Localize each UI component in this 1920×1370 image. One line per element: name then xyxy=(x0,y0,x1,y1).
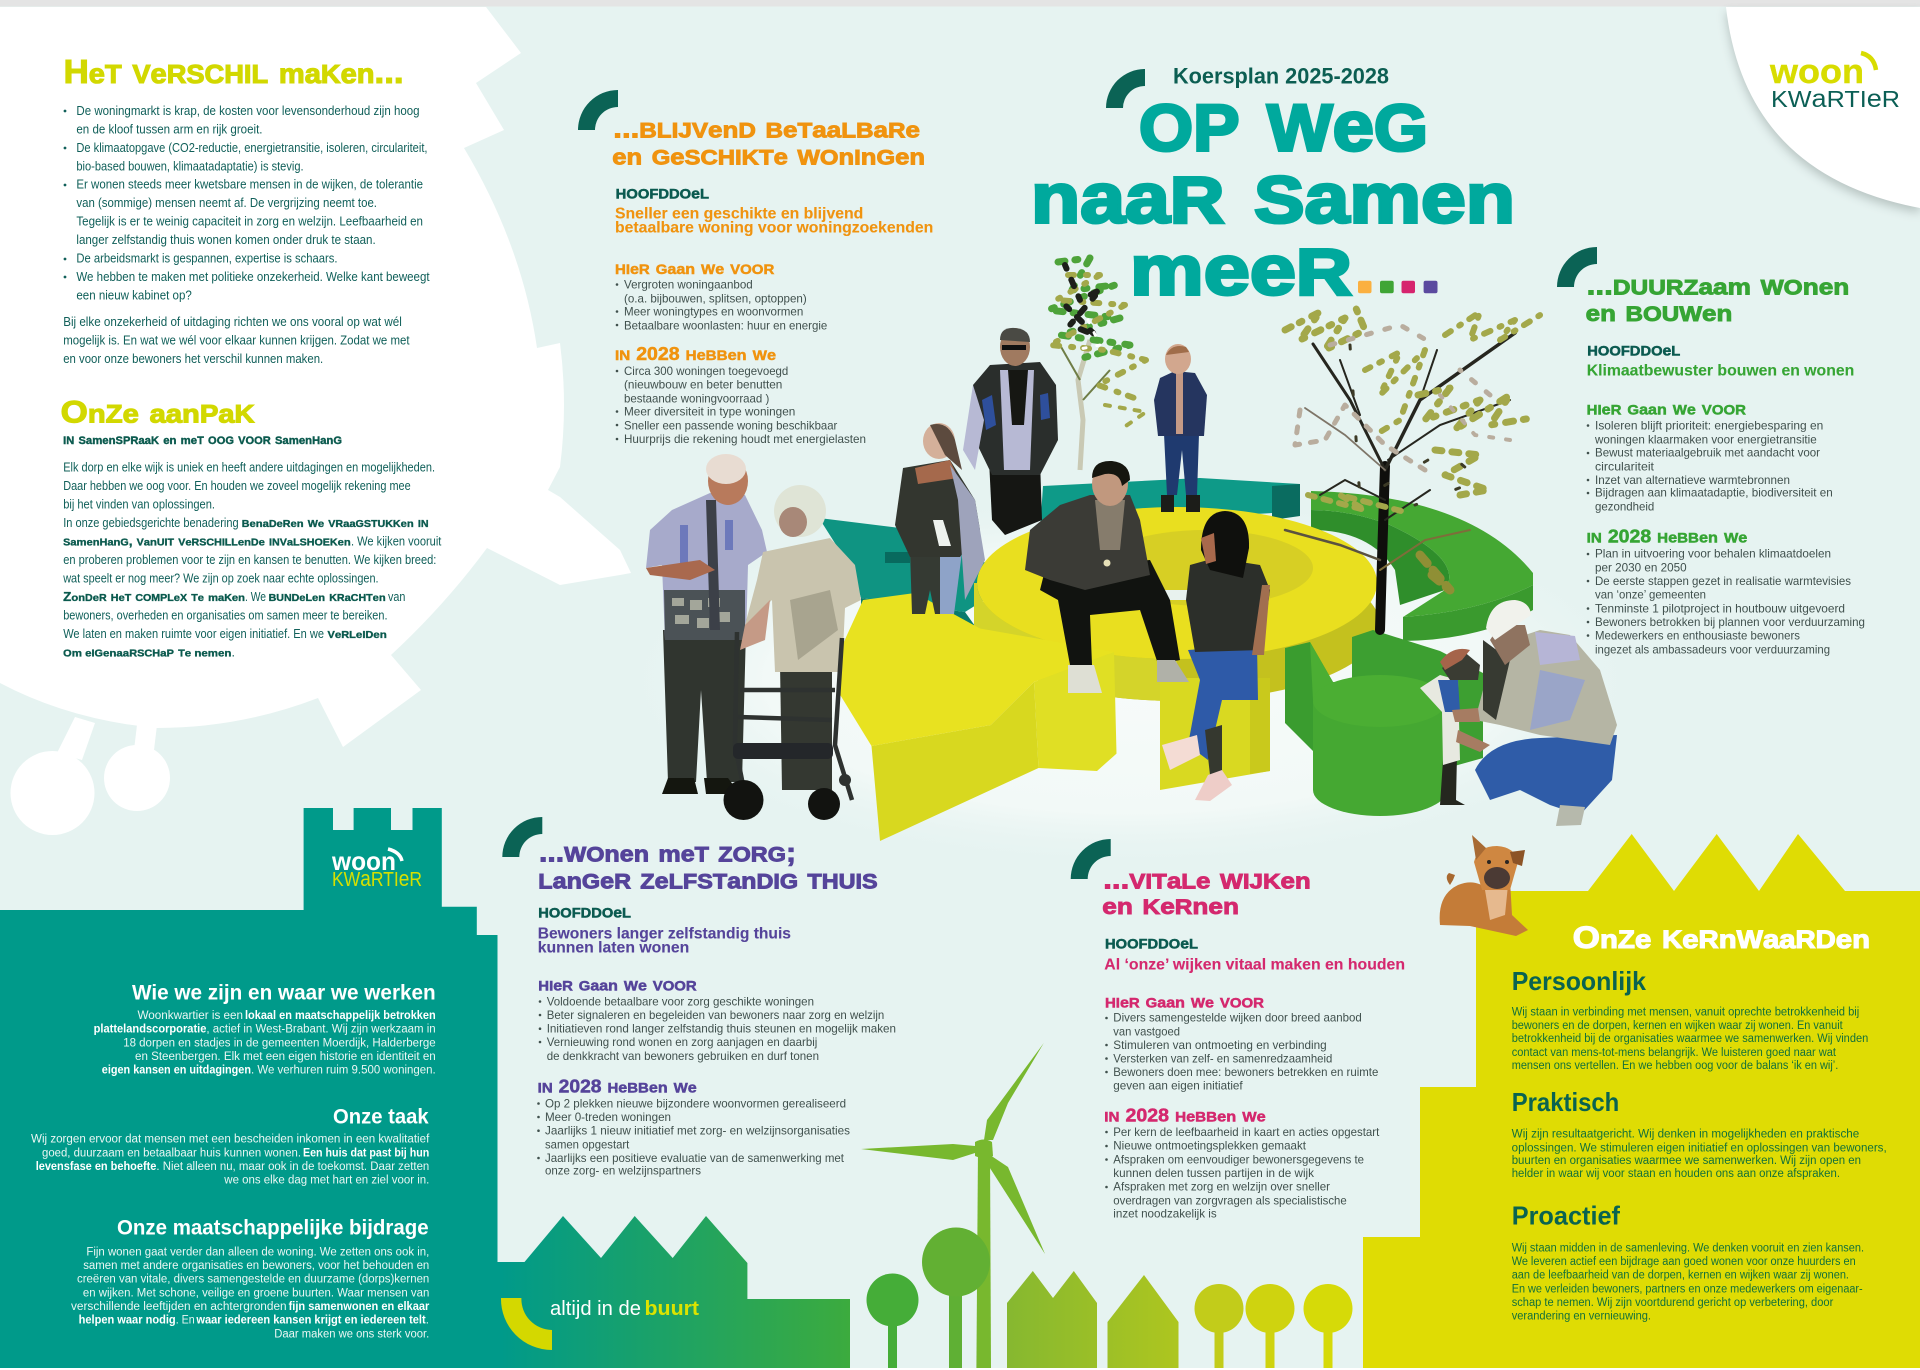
hier gaan we voor: Meer woningtypes en woonvormen xyxy=(624,305,803,319)
hier gaan we voor: circulariteit xyxy=(1595,460,1655,474)
paragraph: onze taak: Wij zorgen ervoor dat mensen met een bescheiden inkomen in een kwalitatief xyxy=(31,1134,430,1146)
four coloured dots xyxy=(1358,281,1438,293)
green arc back right xyxy=(1311,491,1533,641)
in 2028 hebben we: Tenminste 1 pilotproject in houtbouw uitgevoerd xyxy=(1595,601,1845,615)
in 2028 hebben we: Plan in uitvoering voor behalen klimaatdoelen xyxy=(1595,547,1831,561)
bullet list: Tegelijk is er te weinig capaciteit in zorg en welzijn. Leefbaarheid en xyxy=(76,215,423,229)
in 2028 hebben we: per 2030 en 2050 xyxy=(1595,561,1687,575)
paragraph: onze taak: goed, duurzaam en betaalbaar huis kunnen wonen. xyxy=(42,1147,301,1159)
subheading: in samenspraak en met oog voor samenhang xyxy=(63,431,342,448)
green block front xyxy=(1285,630,1483,816)
paragraph: en proberen problemen voor te zijn en kansen te benutten. We kijken breed: xyxy=(63,553,436,567)
logo: woonkwartier: woon xyxy=(1769,53,1864,91)
value: proactief xyxy=(1512,1201,1864,1322)
in 2028 hebben we xyxy=(537,1075,850,1178)
logo in castle: woon xyxy=(331,846,396,876)
value: proactief: Wij staan midden in de samenleving. We denken vooruit en zien kansen. xyxy=(1512,1243,1864,1255)
in 2028 hebben we: Huurprijs die rekening houdt met energielasten xyxy=(624,432,866,446)
hier gaan we voor: Initiatieven rond langer zelfstandig thuis steunen en mogelijk maken xyxy=(547,1022,896,1036)
branches xyxy=(1285,333,1515,630)
illustration: standing man with sunglasses xyxy=(963,328,1058,535)
paragraph: wie we zijn: . We verhuren ruim 9.500 woningen. xyxy=(251,1065,436,1077)
paragraph: om eigenaarsch ap te nemen xyxy=(63,644,231,660)
in 2028 hebben we: Medewerkers en enthousiaste bewoners xyxy=(1595,629,1800,643)
in 2028 hebben we: Afspraken om eenvoudiger bewonersgegevens te xyxy=(1113,1152,1364,1166)
value: persoonlijk: betrokkenheid bij de organisaties waarmee we samenwerken. Wij vinden xyxy=(1512,1033,1868,1045)
bottom white strip xyxy=(0,1368,1920,1370)
value: persoonlijk: bewoners en de dorpen, kernen en wijken waar zij wonen. En vanuit xyxy=(1512,1020,1843,1032)
paragraph: maatschappelijke bijdrage: en wijken. Met schone, veilige en groene buurten. Waar mensen van xyxy=(83,1287,429,1299)
paragraph: maatschappelijke bijdrage: verschillende leeftijden en achtergronden xyxy=(71,1301,287,1313)
panel: vitale wijken (pink) xyxy=(1071,839,1405,1220)
value: persoonlijk: contact van mens-tot-mens belangrijk. We luisteren goed naar wat xyxy=(1512,1047,1837,1059)
in 2028 hebben we: onze zorg- en welzijnspartners xyxy=(545,1164,701,1178)
paragraph: maatschappelijke bijdrage: samen met andere organisaties en bewoners, voor het behouden en xyxy=(83,1260,429,1272)
yellow arrow block xyxy=(837,593,1116,841)
bullet list xyxy=(64,104,430,302)
paragraph: bij het vinden van oplossingen. xyxy=(63,498,215,512)
heading: en bouw en xyxy=(1586,295,1732,328)
value: praktisch: Wij zijn resultaatgericht. Wij denken in mogelijkheden en praktische xyxy=(1512,1128,1859,1140)
panel: wonen met zorg (purple) xyxy=(502,817,896,1178)
value: persoonlijk xyxy=(1512,966,1868,1072)
paragraph: bundelen krachten xyxy=(269,588,386,604)
tagline: altijd in de buurt: buurt xyxy=(644,1298,699,1320)
paragraph: maatschappelijke bijdrage: helpen waar nodig xyxy=(79,1315,176,1327)
hier gaan we voor: Bijdragen aan klimaatadaptie, biodiversiteit en xyxy=(1595,486,1833,500)
heading: en kernen xyxy=(1102,888,1239,921)
logo in castle: kwartier xyxy=(332,861,422,893)
illustration: child and kneeling worker xyxy=(1420,600,1617,826)
heading xyxy=(1102,862,1311,921)
paragraph: Zonder het compl ex te maken xyxy=(63,588,245,604)
in 2028 hebben we: Per kern de leefbaarheid in kaart en acties opgestart xyxy=(1113,1125,1380,1139)
bullet list: en de kloof tussen arm en rijk groeit. xyxy=(76,122,263,136)
paragraph: benaderen we vraagstukk en in xyxy=(242,514,429,530)
arc xyxy=(1071,839,1111,879)
left text: het verschil maken xyxy=(63,50,430,366)
hier gaan we voor: de denkkracht van bewoners gebruiken en durf tonen xyxy=(547,1049,819,1063)
paragraph: maatschappelijke bijdrage: . En xyxy=(176,1315,195,1327)
paragraph: wie we zijn: plattelandscorporatie xyxy=(94,1024,206,1036)
panel: duurzaam wonen (green) xyxy=(1557,247,1865,656)
illustration: big tree xyxy=(1285,306,1545,630)
value: proactief: En we verleiden bewoners, partners en onze medewerkers om eigenaar- xyxy=(1512,1283,1863,1295)
hier gaan we voor xyxy=(538,973,896,1063)
teal block left xyxy=(819,518,1000,640)
heading: langer zelfst andig thuis xyxy=(538,862,878,895)
main title: mee r xyxy=(1130,209,1352,314)
paragraph: wie we zijn: Woonkwartier is een xyxy=(138,1010,243,1022)
paragraph: maatschappelijke bijdrage: fijn samenwonen en elkaar xyxy=(289,1301,430,1313)
value: praktisch xyxy=(1512,1087,1887,1180)
in 2028 hebben we: (nieuwbouw en beter benutten xyxy=(624,378,782,392)
paragraph: mogelijk is. En wat we wél voor elkaar kunnen krijgen. Zodat we met xyxy=(63,334,410,348)
heading xyxy=(1586,268,1849,328)
illustration: seated man xyxy=(1025,461,1189,693)
value: persoonlijk: Persoonlijk xyxy=(1512,966,1647,996)
logo in castle xyxy=(331,846,422,893)
arc xyxy=(1557,247,1597,287)
in 2028 hebben we: Meer diversiteit in type woningen xyxy=(624,405,795,419)
paragraph: In onze gebiedsgerichte benadering xyxy=(63,516,239,530)
walker xyxy=(735,632,852,800)
paragraph: en voor onze bewoners het verschil kunnen maken. xyxy=(63,352,323,366)
hier gaan we voor: Vernieuwing rond wonen en zorg aanjagen en daarbij xyxy=(547,1035,817,1049)
hier gaan we voor: hier gaan we voor xyxy=(1587,398,1746,420)
in 2028 hebben we: kunnen delen tussen partijen in de wijk xyxy=(1113,1166,1315,1180)
heading xyxy=(538,836,878,895)
yellow block under seated woman xyxy=(1160,678,1270,790)
logo: woonkwartier: kwartier xyxy=(1771,77,1900,114)
in 2028 hebben we: overdragen van zorgvragen als specialistische xyxy=(1113,1193,1347,1207)
value: praktisch: Praktisch xyxy=(1512,1087,1619,1117)
hier gaan we voor: Isoleren blijft prioriteit: energiebesparing en xyxy=(1595,418,1823,432)
bullet list: De klimaatopgave (CO2-reductie, energietransitie, isoleren, circulariteit, xyxy=(76,141,428,155)
hier gaan we voor: van vastgoed xyxy=(1113,1024,1180,1038)
paragraph: We laten en maken ruimte voor eigen initiatief. En we xyxy=(63,627,324,641)
trees and houses in skyline xyxy=(866,1228,1352,1368)
hier gaan we voor: Betaalbare woonlasten: huur en energie xyxy=(624,318,828,332)
heading: en geschikt e wo ningen xyxy=(612,139,925,172)
heading: ...wonen met zorg ; xyxy=(539,836,796,869)
bullet list: van (sommige) mensen neemt af. De vergrijzing neemt toe. xyxy=(76,196,377,210)
hier gaan we voor: geven aan eigen initiatief xyxy=(1113,1079,1243,1093)
paragraph: Daar hebben we oog voor. En houden we zoveel mogelijk rekening mee xyxy=(63,479,411,493)
bullet list: bio-based bouwen, klimaatadaptatie) is stevig. xyxy=(76,159,304,173)
paragraph: . xyxy=(232,646,235,660)
yellow ring xyxy=(974,507,1380,701)
in 2028 hebben we: Meer 0-treden woningen xyxy=(545,1110,671,1124)
hoofddoel: hoofddo el xyxy=(616,181,709,203)
in 2028 hebben we: Op 2 plekken nieuwe bijzondere woonvormen gerealiseerd xyxy=(545,1096,846,1110)
logo: woonkwartier xyxy=(1769,53,1900,114)
hoofddoel: betaalbare woning voor woningzoekenden xyxy=(615,220,933,237)
heading: Onze aanpak xyxy=(61,392,255,431)
in 2028 hebben we: Jaarlijks een positieve evaluatie van de samenwerking met xyxy=(545,1151,845,1165)
paragraph: verleiden xyxy=(328,625,387,641)
hoofddoel: hoofddoel xyxy=(1587,339,1681,361)
paragraph: onze taak: . Niet alleen nu, maar ook in de toekomst. Daar zetten xyxy=(156,1161,429,1173)
hier gaan we voor: Divers samengestelde wijken door breed aanbod xyxy=(1113,1011,1362,1025)
illustration: seated woman with headscarf xyxy=(1162,511,1270,801)
heading: ...vitale wijk en xyxy=(1103,862,1311,895)
paragraph: . We kijken vooruit xyxy=(351,534,442,548)
in 2028 hebben we: inzet noodzakelijk is xyxy=(1113,1206,1217,1220)
main title: op weg xyxy=(1139,66,1428,171)
in 2028 hebben we: Nieuwe ontmoetingsplekken gemaakt xyxy=(1113,1139,1307,1153)
hoofddoel: hoofddoel xyxy=(1105,932,1198,954)
in 2028 hebben we: in 2028 hebben we xyxy=(615,343,776,365)
paragraph: wie we zijn: en Steenbergen. Elk met een eigen historie en identiteit en xyxy=(135,1051,436,1063)
hoofddoel xyxy=(538,901,791,957)
bottom skyline: teal-green buildings xyxy=(500,1216,850,1368)
paragraph: Elk dorp en elke wijk is uniek en heeft andere uitdagingen en mogelijkheden. xyxy=(63,461,435,475)
paragraph: Bij elke onzekerheid of uitdaging richten we ons vooral op wat wél xyxy=(63,315,402,329)
paragraph: wie we zijn: eigen kansen en uitdagingen xyxy=(102,1065,251,1077)
paragraph xyxy=(62,461,442,660)
in 2028 hebben we: Circa 300 woningen toegevoegd xyxy=(624,364,788,378)
paragraph: wie we zijn: lokaal en maatschappelijk betrokken xyxy=(245,1010,436,1022)
illustration: old man xyxy=(646,454,767,794)
browser top bar xyxy=(0,0,1920,6)
hier gaan we voor: hier gaan we voor xyxy=(615,257,774,279)
paragraph: . We xyxy=(245,590,266,604)
in 2028 hebben we: van ‘onze’ gemeenten xyxy=(1595,588,1706,602)
hier gaan we voor xyxy=(1105,991,1379,1093)
bullet list: De woningmarkt is krap, de kosten voor levensonderhoud zijn hoog xyxy=(76,104,420,118)
tagline: altijd in de buurt: altijd in de xyxy=(550,1298,641,1320)
hoofddoel: kunnen laten wonen xyxy=(538,940,689,957)
in 2028 hebben we xyxy=(1104,1105,1380,1220)
hier gaan we voor: Versterken van zelf- en samenredzaamheid xyxy=(1113,1051,1332,1065)
heading: Het verschil maken... xyxy=(64,50,404,91)
paragraph xyxy=(63,315,410,366)
in 2028 hebben we: in 2028 hebben we xyxy=(1587,526,1747,548)
in 2028 hebben we: ingezet als ambassadeurs voor verduurzaming xyxy=(1595,642,1830,656)
paragraph: van xyxy=(388,590,405,604)
paragraph: onze taak: we ons elke dag met hart en ziel voor in. xyxy=(223,1175,429,1187)
paragraph: maatschappelijke bijdrage: Daar maken we ons sterk voor. xyxy=(274,1328,429,1340)
paragraph: maatschappelijke bijdrage: . xyxy=(426,1315,429,1327)
hier gaan we voor xyxy=(1587,398,1833,513)
teal block back right xyxy=(1040,478,1300,530)
value: proactief: verandering en vernieuwing. xyxy=(1512,1310,1651,1322)
paragraph: maatschappelijke bijdrage: waar iedereen kansen krijgt en iedereen telt xyxy=(195,1315,426,1327)
value: praktisch: helder in waar wij voor staan en houden ons aan onze afspraken. xyxy=(1512,1168,1840,1180)
hier gaan we voor: Bewust materiaalgebruik met aandacht voor xyxy=(1595,446,1820,460)
hoofddoel xyxy=(1104,932,1405,973)
in 2028 hebben we: Jaarlijks 1 nieuw initiatief met zorg- en welzijnsorganisaties xyxy=(545,1124,850,1138)
value: persoonlijk: mensen ons vertellen. En we hebben oog voor de balans ‘ik en wij’. xyxy=(1512,1060,1838,1072)
value: persoonlijk: Wij staan in verbinding met mensen, vanuit oprechte betrokkenheid bij xyxy=(1512,1006,1859,1018)
heading: wie we zijn: Wie we zijn en waar we werken xyxy=(132,981,436,1004)
bullet list: langer zelfstandig thuis wonen komen onder druk te staan. xyxy=(76,233,376,247)
panel: betaalbare woningen (orange) xyxy=(578,90,933,446)
value: proactief: We leveren actief een bijdrage aan goed wonen voor onze huurders en xyxy=(1512,1256,1856,1268)
in 2028 hebben we: Sneller een passende woning beschikbaar xyxy=(624,418,837,432)
dog xyxy=(1440,835,1528,936)
value: proactief: schap te nemen. Wij zijn voortdurend gericht op verbetering, door xyxy=(1512,1297,1833,1309)
panel: onze kernwaarden xyxy=(1512,917,1887,1322)
left text: onze aanpak xyxy=(61,392,442,660)
hoofddoel: Klimaatbewuster bouwen en wonen xyxy=(1587,362,1854,379)
in 2028 hebben we: samen opgestart xyxy=(545,1137,630,1151)
hier gaan we voor: gezondheid xyxy=(1595,499,1654,513)
bullet list: Er wonen steeds meer kwetsbare mensen in de wijken, de tolerantie xyxy=(76,178,423,192)
hoofddoel: Al ‘onze’ wijken vitaal maken en houden xyxy=(1104,956,1405,973)
hoofddoel: Bewoners langer zelfstandig thuis xyxy=(538,925,791,942)
teal panel text xyxy=(31,981,436,1340)
paragraph: maatschappelijke bijdrage xyxy=(71,1246,430,1340)
value: proactief: Proactief xyxy=(1512,1201,1620,1231)
yellow arc in building xyxy=(501,1298,552,1350)
foliage blotches xyxy=(1048,258,1146,430)
in 2028 hebben we: Afspraken met zorg en welzijn over sneller xyxy=(1113,1180,1330,1194)
hier gaan we voor: Vergroten woningaanbod xyxy=(624,277,753,291)
heading: Onze kernwaarden xyxy=(1573,917,1870,956)
heading: ...blijv end b etaalbare xyxy=(613,111,920,144)
paragraph: wat speelt er nog meer? We zijn op zoek naar echte oplossingen. xyxy=(62,572,379,586)
heading xyxy=(612,111,925,172)
paragraph: onze taak: levensfase en behoefte xyxy=(36,1161,156,1173)
arc xyxy=(578,90,618,130)
in 2028 hebben we xyxy=(1587,526,1865,656)
hier gaan we voor: hier gaan we voor xyxy=(538,973,697,995)
in 2028 hebben we: Bewoners betrokken bij plannen voor verduurzaming xyxy=(1595,615,1865,629)
heading: onze taak: Onze taak xyxy=(333,1105,429,1128)
bullet list: De arbeidsmarkt is gespannen, expertise is schaars. xyxy=(76,252,338,266)
main title: naar samen xyxy=(1031,137,1515,242)
illustration: standing boy xyxy=(1154,344,1207,512)
paragraph: bewoners, overheden en organisaties om samen meer te bereiken. xyxy=(63,608,387,622)
hier gaan we voor: hier gaan we voor xyxy=(1105,991,1264,1013)
paragraph: wie we zijn: 18 dorpen en stadjes in de gemeenten Moerdijk, Halderberge xyxy=(123,1037,436,1049)
heading: onze maatschappelijke bijdrage: Onze maatschappelijke bijdrage xyxy=(117,1216,429,1239)
hoofddoel: Sneller een geschikte en blijvend xyxy=(615,205,863,222)
hier gaan we voor: Stimuleren van ontmoeting en verbinding xyxy=(1113,1038,1327,1052)
foliage blotches xyxy=(1285,306,1545,590)
wind turbine xyxy=(861,1043,1045,1368)
value: praktisch: oplossingen. We stimuleren eigen initiatief en oplossingen van bewoners, xyxy=(1512,1143,1887,1155)
tagline: altijd in de buurt xyxy=(550,1298,699,1320)
top-right white logo corner xyxy=(1726,7,1920,213)
bullet list: een nieuw kabinet op? xyxy=(76,288,192,302)
central illustration: floor glow xyxy=(610,490,1650,870)
in 2028 hebben we: De eerste stappen gezet in realisatie warmtevisies xyxy=(1595,574,1851,588)
worker xyxy=(1475,735,1617,815)
hier gaan we voor xyxy=(615,257,828,332)
main title xyxy=(1031,66,1515,314)
paragraph: onze taak: Een huis dat past bij hun xyxy=(303,1147,429,1159)
value: praktisch: buurten en organisaties waarmee we samenwerken. Wij zijn open en xyxy=(1512,1155,1861,1167)
hier gaan we voor: Inzet van alternatieve warmtebronnen xyxy=(1595,473,1790,487)
value: proactief: aan de leefbaarheid van de dorpen, kernen en wijken waar zij wonen. xyxy=(1512,1270,1849,1282)
paragraph: onze taak xyxy=(31,1134,430,1187)
arc xyxy=(502,817,542,857)
title block xyxy=(1031,63,1515,314)
white gear shape xyxy=(0,7,631,835)
heading: ...duurz aam wo nen xyxy=(1587,268,1849,301)
hier gaan we voor: woningen klaarmaken voor energietransitie xyxy=(1594,432,1817,446)
in 2028 hebben we: bestaande woningvoorraad ) xyxy=(624,391,769,405)
hier gaan we voor: Voldoende betaalbare voor zorg geschikte woningen xyxy=(547,994,814,1008)
hoofddoel: hoofddoel xyxy=(538,901,631,923)
in 2028 hebben we: in 2028 hebben we xyxy=(538,1075,697,1097)
paragraph: maatschappelijke bijdrage: Fijn wonen gaat verder dan alleen de woning. We zetten ons ook in, xyxy=(86,1246,429,1258)
teal panel with castle xyxy=(0,808,525,1368)
hier gaan we voor: (o.a. bijbouwen, splitsen, optoppen) xyxy=(624,291,807,305)
illustration: small tree behind people xyxy=(1048,258,1146,470)
hier gaan we voor: Bewoners doen mee: bewoners betrekken en ruimte xyxy=(1113,1065,1379,1079)
paragraph: maatschappelijke bijdrage: creëren van vitale, divers samengestelde en duurzame (dorps)kernen xyxy=(77,1274,429,1286)
in 2028 hebben we: in 2028 hebben we xyxy=(1104,1105,1266,1127)
hier gaan we voor: Beter signaleren en begeleiden van bewoners naar zorg en welzijn xyxy=(547,1008,884,1022)
yellow panel background xyxy=(1363,834,1920,1368)
title arc xyxy=(1106,69,1145,108)
paragraph: samenhang, vanuit verschill ende invalshoek en xyxy=(63,532,351,548)
subtitle: Koersplan 2025-2028 xyxy=(1173,63,1389,88)
hoofddoel xyxy=(615,181,933,237)
illustration: 3D logo blocks xyxy=(819,478,1533,841)
illustration: woman in coat xyxy=(895,423,985,614)
paragraph: wie we zijn: , actief in West-Brabant. Wij zijn werkzaam in xyxy=(206,1024,436,1036)
illustration: old woman with walker xyxy=(724,485,861,820)
hoofddoel xyxy=(1587,339,1854,379)
in 2028 hebben we xyxy=(615,343,866,446)
paragraph: wie we zijn xyxy=(94,1010,436,1077)
bullet list: We hebben te maken met politieke onzekerheid. Welke kant beweegt xyxy=(76,270,430,284)
